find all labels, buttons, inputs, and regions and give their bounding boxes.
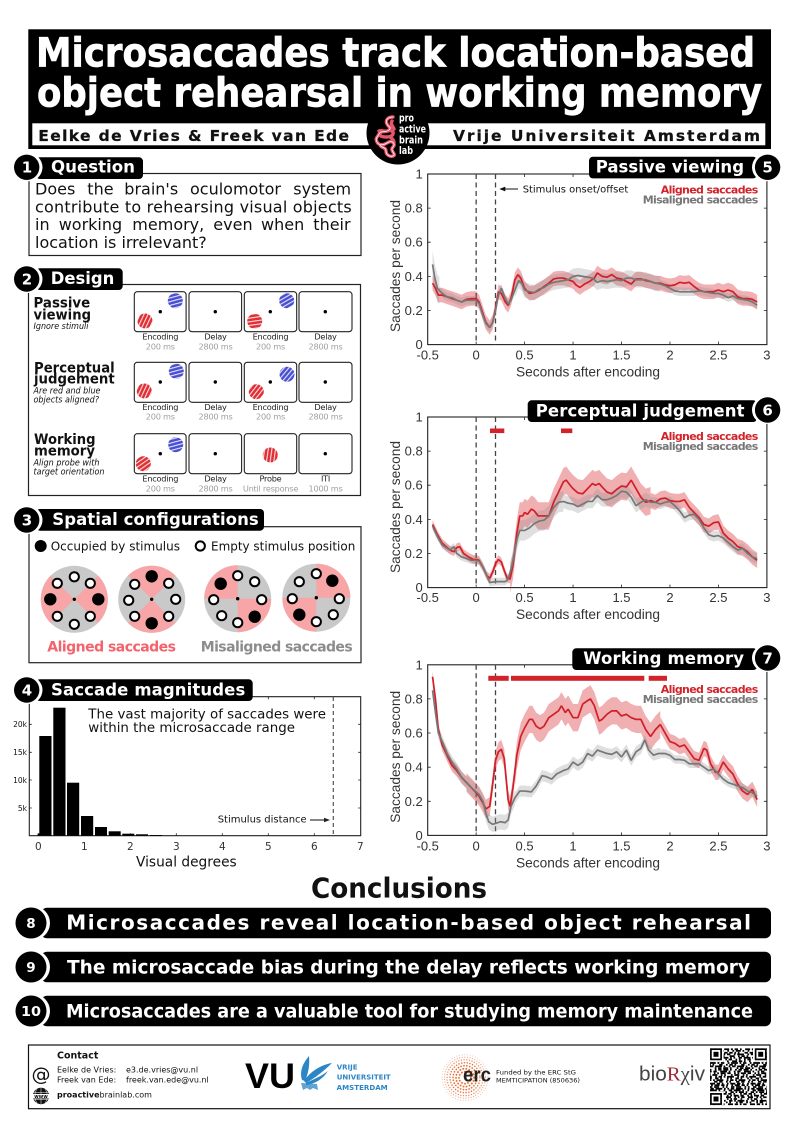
logo: Vrije Universiteit Amsterdam: UNIVERSITEIT <box>337 1073 391 1081</box>
diagram: misaligned diagonal 1 <box>204 565 271 632</box>
x axis title: Seconds after encoding <box>516 607 660 622</box>
panel 3: spatial configurations <box>14 506 361 663</box>
x axis labels: 5 <box>265 841 272 853</box>
x tick labels: 3 <box>763 838 771 853</box>
footer panel <box>28 1045 770 1109</box>
question text: when <box>261 215 304 234</box>
y tick labels <box>405 166 423 352</box>
conclusion 8: Microsaccades reveal location-based object rehearsal <box>66 910 751 934</box>
x tick labels <box>416 348 771 362</box>
histogram bars <box>38 708 162 836</box>
heading: design <box>14 265 123 293</box>
x axis labels <box>35 841 364 853</box>
y axis labels: 5k <box>18 804 28 813</box>
x axis labels: 4 <box>219 841 226 853</box>
y tick labels: 0.6 <box>405 725 423 740</box>
legend: Misaligned saccades <box>643 194 759 207</box>
legend: Occupied by stimulus <box>51 540 180 554</box>
x tick labels: -0.5 <box>416 838 439 853</box>
heading: design: Design <box>51 269 114 288</box>
row: perceptual judgement: Are red and blue <box>33 386 101 396</box>
y tick labels: 0.4 <box>405 512 423 527</box>
row: passive viewing: Delay <box>314 331 337 341</box>
significance bars <box>488 676 667 681</box>
question text: the <box>87 179 114 198</box>
row: passive viewing: 2800 ms <box>309 341 342 351</box>
conclusion 9 <box>16 950 771 984</box>
y tick labels: 0.4 <box>405 760 423 775</box>
row: perceptual judgement: 200 ms <box>146 412 175 422</box>
y axis title: Saccades per second <box>388 441 403 573</box>
row: passive viewing: Ignore stimuli <box>34 322 89 332</box>
row: working memory: Delay <box>204 474 227 484</box>
y tick labels: 0.2 <box>405 546 423 561</box>
row: working memory: 1000 ms <box>309 484 342 494</box>
question text: contribute to rehearsing visual objects <box>35 197 352 216</box>
row: working memory: target orientation <box>34 467 105 477</box>
logo: ERC: Funded by the ERC StG <box>496 1068 576 1076</box>
x tick labels: -0.5 <box>416 590 439 605</box>
label: misaligned saccades: Misaligned saccades <box>201 640 353 656</box>
question text: their <box>313 215 351 234</box>
chart 5: passive viewing <box>388 166 771 380</box>
stimulus distance line <box>332 697 334 835</box>
legend: Empty stimulus position <box>211 540 355 554</box>
row: working memory <box>33 432 352 494</box>
x tick labels: -0.5 <box>416 348 439 362</box>
question text: working <box>59 215 122 234</box>
heading: perceptual judgement: 6 <box>762 401 773 419</box>
x tick labels <box>416 590 771 605</box>
conclusion 10: 10 <box>21 1004 41 1020</box>
chart 7: working memory <box>388 657 771 870</box>
row: perceptual judgement: Encoding <box>142 402 178 412</box>
question text: even <box>213 215 253 234</box>
x tick labels: 1.5 <box>612 348 631 362</box>
onset and offset lines <box>476 665 496 835</box>
x tick labels: 2 <box>666 838 674 853</box>
panel 1: question <box>14 153 361 256</box>
contact block: e3.de.vries@vu.nl <box>126 1066 198 1075</box>
row: working memory: Working <box>34 432 96 448</box>
y axis labels <box>13 720 28 813</box>
heading: working memory: 7 <box>762 649 773 667</box>
y axis labels: 20k <box>13 720 28 729</box>
x tick labels: 3 <box>763 590 771 605</box>
conclusion 9: 9 <box>26 960 36 976</box>
heading: saccade magnitudes: Saccade magnitudes <box>51 680 245 699</box>
conclusion 9: The microsaccade bias during the delay reflects working memory <box>67 956 751 978</box>
curves <box>433 480 757 582</box>
logo text: lab <box>399 145 413 157</box>
y axis title: Saccades per second <box>388 200 403 332</box>
conclusion 10 <box>16 994 771 1028</box>
panel 4: saccade magnitudes histogram <box>13 676 364 871</box>
y axis title: Saccades per second <box>388 691 403 823</box>
row: perceptual judgement: judgement <box>33 372 115 388</box>
logo: ERC: erc <box>463 1065 491 1087</box>
author bar <box>32 123 765 145</box>
legend <box>643 184 759 207</box>
logo text <box>399 113 426 157</box>
question text: system <box>293 179 351 198</box>
heading: passive viewing: Passive viewing <box>596 158 744 177</box>
row: passive viewing: Encoding <box>253 331 288 341</box>
row: passive viewing: viewing <box>34 307 91 323</box>
row: passive viewing: 200 ms <box>146 341 175 351</box>
x tick labels: 0 <box>473 590 480 605</box>
x axis labels: 7 <box>357 841 364 853</box>
heading: spatial configurations: Spatial configurations <box>52 510 259 529</box>
panel 2: design <box>14 265 361 496</box>
question text: in <box>35 215 50 234</box>
curves <box>433 264 757 328</box>
heading: question <box>14 153 143 181</box>
y tick labels: 0.2 <box>405 303 423 318</box>
logo: ERC <box>442 1055 580 1101</box>
conclusion 8: 8 <box>26 916 36 932</box>
logo: proactive brain lab <box>366 102 430 164</box>
row: working memory: 200 ms <box>146 484 175 494</box>
stimulus distance label and arrow: Stimulus distance <box>218 815 307 826</box>
legend: Misaligned saccades <box>643 440 759 453</box>
heading: spatial configurations <box>14 506 264 534</box>
onset and offset lines <box>476 174 496 345</box>
x axis labels: 1 <box>81 841 88 853</box>
heading: saccade magnitudes: 4 <box>22 681 32 699</box>
legend: Aligned saccades <box>661 683 759 696</box>
question text: location is irrelevant? <box>35 233 207 252</box>
x tick labels: 3 <box>763 348 771 362</box>
y tick labels: 0.4 <box>405 269 423 284</box>
legend <box>35 540 355 554</box>
chart 6: perceptual judgement <box>388 410 771 622</box>
logo text: active <box>399 123 426 135</box>
row: passive viewing <box>34 292 352 351</box>
icon: globe: www <box>34 1094 48 1100</box>
icon: globe <box>32 1088 50 1104</box>
y tick labels: 0.8 <box>405 201 423 216</box>
axes frame <box>428 174 767 345</box>
x tick labels: 1 <box>569 838 577 853</box>
diagram: aligned horizontal <box>41 566 108 633</box>
axes frame <box>428 417 767 588</box>
x tick labels: 0 <box>473 838 480 853</box>
y tick labels: 0.6 <box>405 478 423 493</box>
row: working memory: Probe <box>260 474 282 484</box>
row: perceptual judgement <box>33 360 352 422</box>
contact block: proactivebrainlab.com <box>57 1091 152 1100</box>
icon: brain <box>376 117 394 156</box>
legend <box>643 430 759 453</box>
x tick labels: 1 <box>569 348 577 362</box>
row: working memory: ITI <box>321 474 330 484</box>
heading: question: Question <box>51 158 135 177</box>
logo: Vrije Universiteit Amsterdam: AMSTERDAM <box>337 1084 388 1092</box>
y axis labels: 15k <box>13 748 28 757</box>
logo text: pro <box>399 113 414 125</box>
contact block: Contact <box>57 1050 99 1061</box>
logo: Vrije Universiteit Amsterdam <box>245 1056 391 1096</box>
y tick labels: 0.6 <box>405 235 423 250</box>
x tick labels: 2.5 <box>709 590 727 605</box>
conclusion 8 <box>16 906 771 940</box>
diagram: misaligned diagonal 2 <box>282 564 350 632</box>
annotation <box>87 707 326 736</box>
axes frame <box>428 665 767 835</box>
affiliation: Vrije Universiteit Amsterdam <box>453 127 760 145</box>
title text <box>36 31 762 117</box>
y tick labels: 0 <box>415 828 423 843</box>
heading: spatial configurations: 3 <box>22 511 32 529</box>
x axis labels: 6 <box>311 841 318 853</box>
question text: memory, <box>132 215 204 234</box>
row: working memory: memory <box>34 444 95 460</box>
logo text: brain <box>399 134 423 146</box>
legend <box>643 683 759 706</box>
annotation: within the microsaccade range <box>88 721 295 736</box>
row: perceptual judgement: Perceptual <box>34 360 115 376</box>
significance bars <box>490 428 572 433</box>
heading: working memory <box>572 644 780 672</box>
conclusions heading: Conclusions <box>311 871 487 904</box>
row: passive viewing: 2800 ms <box>199 341 232 351</box>
x tick labels: 2.5 <box>709 838 727 853</box>
y tick labels: 0 <box>415 337 423 352</box>
x tick labels: 1.5 <box>612 838 631 853</box>
y tick labels: 0.2 <box>405 794 423 809</box>
x tick labels: 1 <box>569 590 577 605</box>
logo: Vrije Universiteit Amsterdam: VU <box>245 1057 295 1096</box>
question text <box>35 179 352 252</box>
onset and offset lines <box>476 417 496 588</box>
x axis title: Seconds after encoding <box>516 364 660 380</box>
x axis title: Seconds after encoding <box>516 855 660 870</box>
x tick labels: 0.5 <box>516 838 534 853</box>
label: aligned saccades: Aligned saccades <box>47 640 176 656</box>
x tick labels: 0 <box>473 348 480 362</box>
logo: Vrije Universiteit Amsterdam: VRIJE <box>337 1063 358 1071</box>
logo: bioRxiv: bioRχiv <box>639 1064 705 1086</box>
x axis labels: 0 <box>35 841 42 853</box>
x tick labels: 1.5 <box>612 590 631 605</box>
x axis labels: 3 <box>173 841 180 853</box>
y tick labels: 0.8 <box>405 691 423 706</box>
authors: Eelke de Vries & Freek van Ede <box>38 127 349 145</box>
x tick labels: 0.5 <box>516 590 534 605</box>
x tick labels: 0.5 <box>516 348 534 362</box>
heading: perceptual judgement <box>528 396 780 424</box>
row: perceptual judgement: 200 ms <box>256 412 285 422</box>
heading: working memory: Working memory <box>583 649 744 668</box>
heading: passive viewing <box>589 153 780 181</box>
row: passive viewing: Delay <box>204 331 227 341</box>
row: passive viewing: Encoding <box>142 331 178 341</box>
y tick labels: 1 <box>415 166 423 182</box>
row: passive viewing: 200 ms <box>256 341 285 351</box>
row: perceptual judgement: Encoding <box>253 402 288 412</box>
x tick labels: 2 <box>666 348 674 362</box>
heading: passive viewing: 5 <box>762 159 773 177</box>
question text: Does <box>35 179 75 198</box>
diagram: aligned vertical <box>118 566 185 633</box>
row: working memory: Align probe with <box>33 458 100 468</box>
question text: brain's <box>124 179 178 198</box>
row: perceptual judgement: Delay <box>314 402 337 412</box>
x tick labels: 2.5 <box>709 348 727 362</box>
contact block <box>57 1050 209 1100</box>
x tick labels: 2 <box>666 590 674 605</box>
question text: oculomotor <box>190 179 281 198</box>
legend: Aligned saccades <box>661 430 759 443</box>
row: passive viewing: Passive <box>34 296 90 312</box>
heading: saccade magnitudes <box>14 676 253 704</box>
contact block: freek.van.ede@vu.nl <box>126 1076 209 1085</box>
legend: Aligned saccades <box>661 184 759 197</box>
legend: Misaligned saccades <box>643 693 759 706</box>
row: working memory: Until response <box>243 484 298 494</box>
x tick labels <box>416 838 771 853</box>
y tick labels: 1 <box>415 657 423 672</box>
annotation: The vast majority of saccades were <box>87 707 326 722</box>
logo: ERC: MEMTICIPATION (850636) <box>496 1076 580 1084</box>
row: working memory: Encoding <box>142 474 178 484</box>
heading: design: 2 <box>22 270 32 288</box>
y tick labels <box>405 410 423 595</box>
contact block: Eelke de Vries: <box>57 1066 116 1075</box>
onset annotation: Stimulus onset/offset <box>523 184 628 195</box>
heading: perceptual judgement: Perceptual judgement <box>536 401 745 420</box>
y tick labels: 1 <box>415 410 423 424</box>
y tick labels <box>405 657 423 843</box>
y axis labels: 10k <box>13 776 28 785</box>
QR code <box>710 1048 767 1105</box>
row: working memory: 2800 ms <box>199 484 232 494</box>
curves <box>433 677 757 824</box>
contact block: Freek van Ede: <box>57 1076 116 1085</box>
row: perceptual judgement: 2800 ms <box>199 412 232 422</box>
row: perceptual judgement: objects aligned? <box>34 396 99 406</box>
row: perceptual judgement: 2800 ms <box>309 412 342 422</box>
row: perceptual judgement: Delay <box>204 402 227 412</box>
x axis title: Visual degrees <box>136 855 237 871</box>
icon: at sign: @ <box>32 1064 50 1086</box>
y tick labels: 0 <box>415 580 423 595</box>
heading: question: 1 <box>22 159 32 177</box>
x axis labels: 2 <box>127 841 134 853</box>
conclusion 10: Microsaccades are a valuable tool for studying memory maintenance <box>66 1000 753 1022</box>
title banner <box>28 29 771 149</box>
y tick labels: 0.8 <box>405 444 423 459</box>
